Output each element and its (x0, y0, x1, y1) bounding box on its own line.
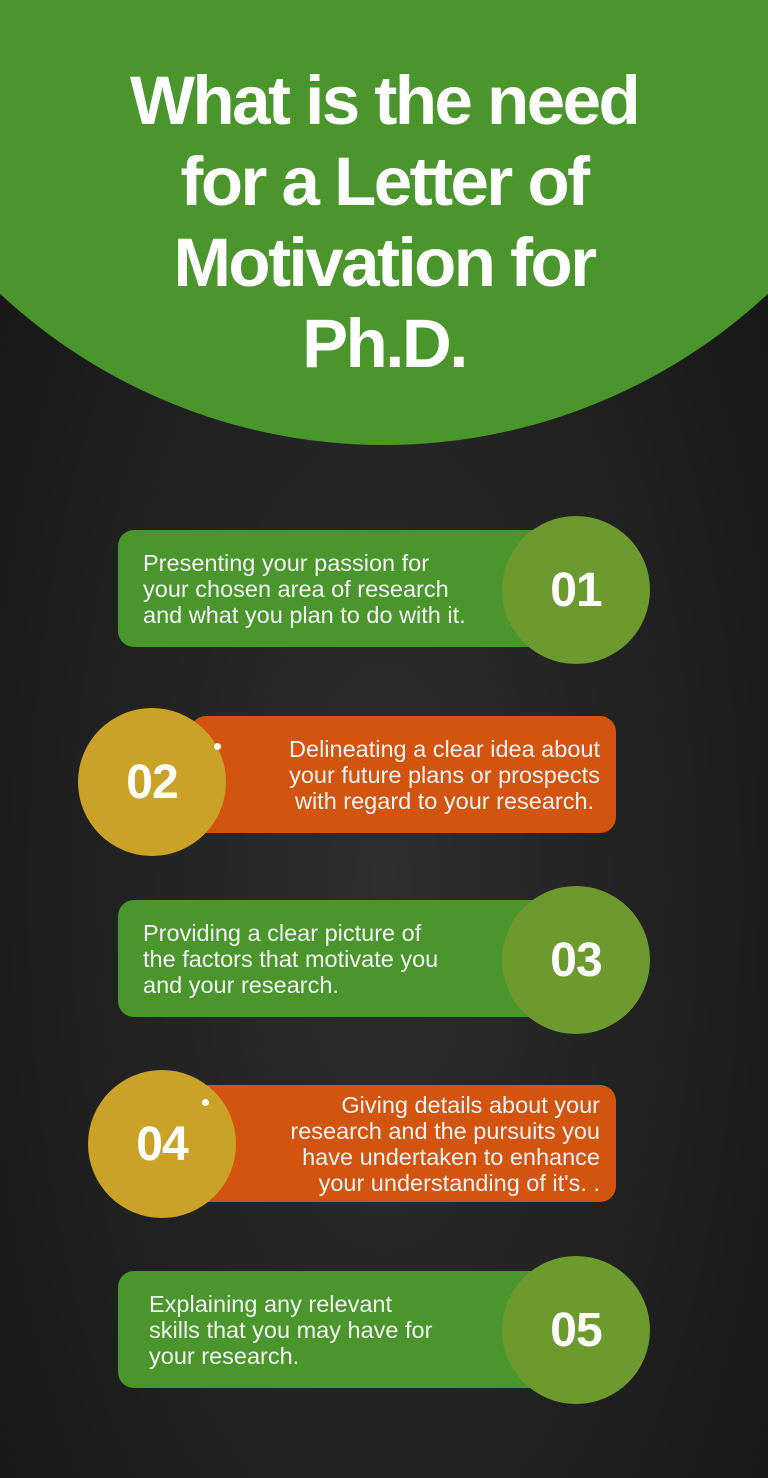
circle 02: 02 (126, 756, 178, 808)
bar 03 text: and your research. (143, 972, 339, 998)
bar 04 text: have undertaken to enhance (302, 1144, 600, 1170)
bar 03 text: the factors that motivate you (143, 946, 438, 972)
bar 04 text (190, 1085, 616, 1202)
title: Ph.D. (302, 305, 466, 382)
bar 04 text: your understanding of it's. . (319, 1170, 600, 1196)
bar 04 text: Giving details about your (341, 1092, 600, 1118)
bar 05 text: your research. (149, 1342, 299, 1368)
header: green circle (0, 0, 768, 445)
circle 04 (88, 1070, 236, 1218)
bar 02 text: your future plans or prospects (289, 762, 600, 788)
bar 01 text: and what you plan to do with it. (143, 602, 466, 628)
circle 02 (78, 708, 226, 856)
bar 02 text (190, 716, 616, 833)
item 03 (118, 886, 650, 1034)
item 01 (118, 516, 650, 664)
circle 01 (502, 516, 650, 664)
circle 04: 04 (136, 1118, 188, 1170)
bar 02 text: Delineating a clear idea about (289, 736, 600, 762)
bar 01 text: your chosen area of research (143, 576, 449, 602)
bullet dot (214, 743, 221, 750)
item 02 (78, 708, 616, 856)
bar 05 text (118, 1271, 558, 1388)
bar 01 text (118, 530, 558, 647)
bar 04 text: research and the pursuits you (290, 1118, 600, 1144)
bar 03 text: Providing a clear picture of (143, 920, 421, 946)
circle 01: 01 (550, 564, 602, 616)
bar 05 text: Explaining any relevant (149, 1290, 392, 1316)
bar 02 text: with regard to your research. (295, 788, 594, 814)
title (130, 62, 638, 382)
title: Motivation for (173, 224, 595, 301)
circle 03: 03 (550, 934, 602, 986)
circle 05: 05 (550, 1304, 602, 1356)
circle 03 (502, 886, 650, 1034)
bar 01 text: Presenting your passion for (143, 550, 429, 576)
bar 03 text (118, 900, 558, 1017)
item 04 (88, 1070, 616, 1218)
circle 05 (502, 1256, 650, 1404)
bullet dot (202, 1099, 209, 1106)
bar 05 text: skills that you may have for (149, 1316, 432, 1342)
item 05 (118, 1256, 650, 1404)
title: What is the need (130, 62, 638, 139)
title: for a Letter of (180, 143, 588, 220)
